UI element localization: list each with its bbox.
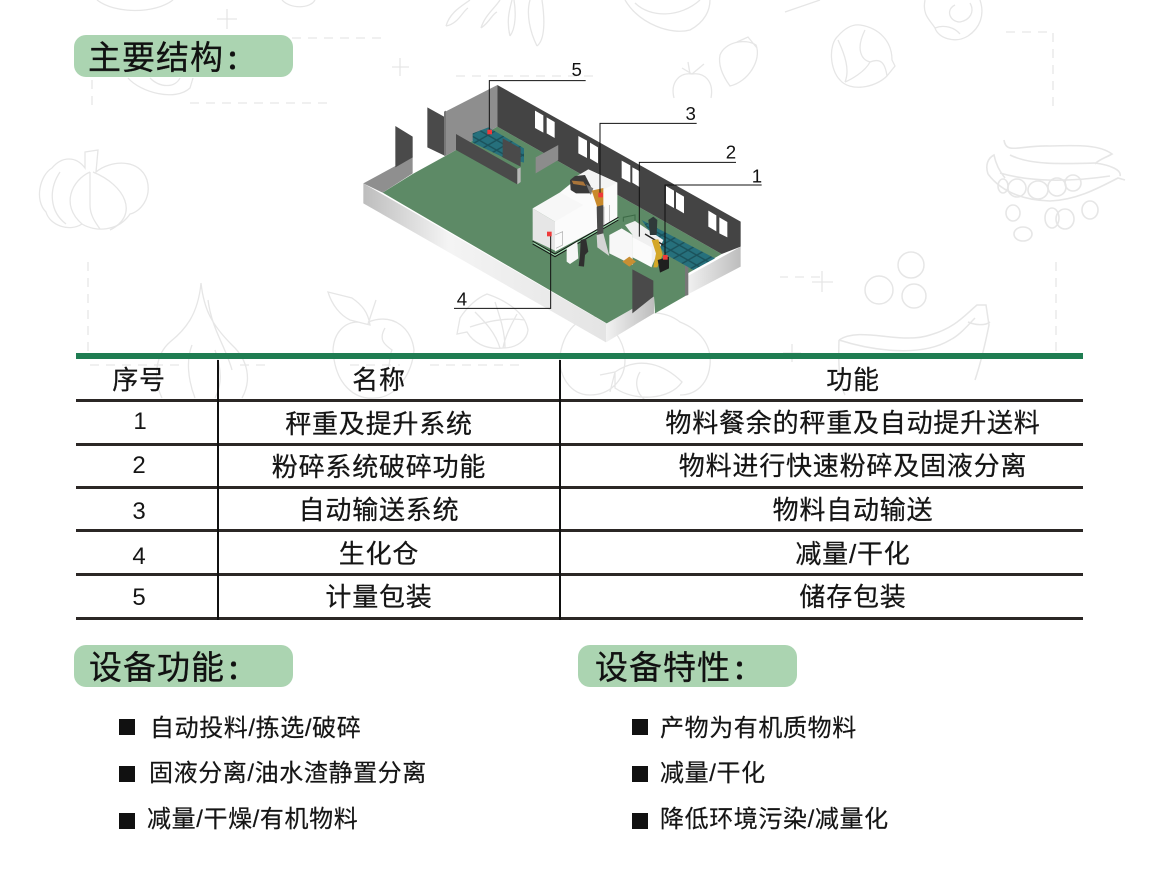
component 3: conveyor (570, 175, 609, 256)
table: 4 (132, 543, 146, 570)
table: 名称 (352, 365, 406, 395)
table: 物料进行快速粉碎及固液分离 (679, 451, 1027, 481)
table header (112, 365, 880, 395)
table: 功能 (826, 365, 880, 395)
component 1: weighing lift (652, 239, 669, 273)
table: 3 (132, 498, 146, 525)
row 1 (133, 408, 1041, 439)
heading: main structure (74, 35, 293, 77)
door (632, 269, 653, 313)
list: equipment characteristics (632, 715, 889, 833)
table: 2 (132, 452, 146, 479)
callout numbers (457, 59, 762, 309)
heading: main structure: 主要结构 (88, 39, 224, 76)
red markers (487, 130, 668, 260)
list: equipment functions: 自动投料/拣选/破碎 (150, 715, 361, 742)
partitions (456, 134, 559, 184)
component 2: crusher (609, 215, 663, 267)
beans (865, 252, 926, 308)
component 4: biochemical silo (533, 169, 618, 257)
leader lines (454, 81, 762, 308)
heading: equipment functions: 设备功能 (89, 649, 225, 686)
garlic (157, 283, 247, 398)
table: 计量包装 (325, 582, 433, 612)
table: 物料自动输送 (773, 495, 933, 525)
banana (839, 305, 990, 395)
crates near label 5 (473, 127, 524, 163)
list: equipment characteristics: 降低环境污染/减量化 (660, 806, 889, 833)
onion under heading (97, 0, 315, 95)
heading: equipment characteristics (578, 645, 797, 687)
list: equipment characteristics: 减量/干化 (660, 760, 766, 787)
cabbage (831, 25, 895, 87)
row 3 (132, 495, 933, 525)
callout numbers: 5 (571, 59, 582, 80)
table: 粉碎系统破碎功能 (272, 452, 486, 482)
strawberries (673, 37, 757, 98)
mushroom and onion (560, 313, 710, 400)
row 2 (132, 451, 1027, 482)
callout numbers: 1 (752, 165, 762, 186)
slab and floor (363, 127, 722, 342)
table: 序号 (112, 365, 166, 395)
row 4 (132, 539, 911, 570)
table (76, 353, 1083, 620)
heading: main structure: ： (226, 45, 253, 75)
callout numbers: 3 (685, 103, 696, 124)
table: 5 (132, 584, 146, 611)
artichoke (457, 294, 528, 348)
heading: equipment functions: ： (227, 655, 254, 685)
pumpkin (39, 150, 148, 230)
heading: equipment functions (74, 645, 293, 687)
person and cabinet (567, 238, 588, 267)
row 5 (132, 582, 907, 612)
windows (535, 111, 727, 237)
table: 自动输送系统 (299, 495, 459, 525)
heading: equipment characteristics: ： (733, 655, 760, 685)
crates near label 1 (642, 220, 715, 270)
list: equipment functions (119, 715, 427, 833)
heading: equipment characteristics: 设备特性 (595, 649, 731, 686)
walls (363, 85, 741, 296)
table: 物料餐余的秤重及自动提升送料 (665, 408, 1041, 438)
table: 秤重及提升系统 (285, 409, 473, 439)
table: 储存包装 (799, 582, 907, 612)
raspberry (924, 0, 982, 40)
list: equipment functions: 减量/干燥/有机物料 (147, 806, 358, 833)
pea pods (987, 140, 1125, 241)
table: 1 (133, 408, 147, 435)
list: equipment characteristics: 产物为有机质物料 (660, 715, 857, 742)
table: 生化仓 (339, 539, 419, 569)
apple (328, 292, 414, 398)
list: equipment functions: 固液分离/油水渣静置分离 (149, 760, 427, 787)
top leaves and citrus (446, 0, 820, 46)
callout numbers: 2 (726, 141, 736, 162)
callout numbers: 4 (457, 288, 467, 309)
table: 减量/干化 (795, 539, 911, 569)
